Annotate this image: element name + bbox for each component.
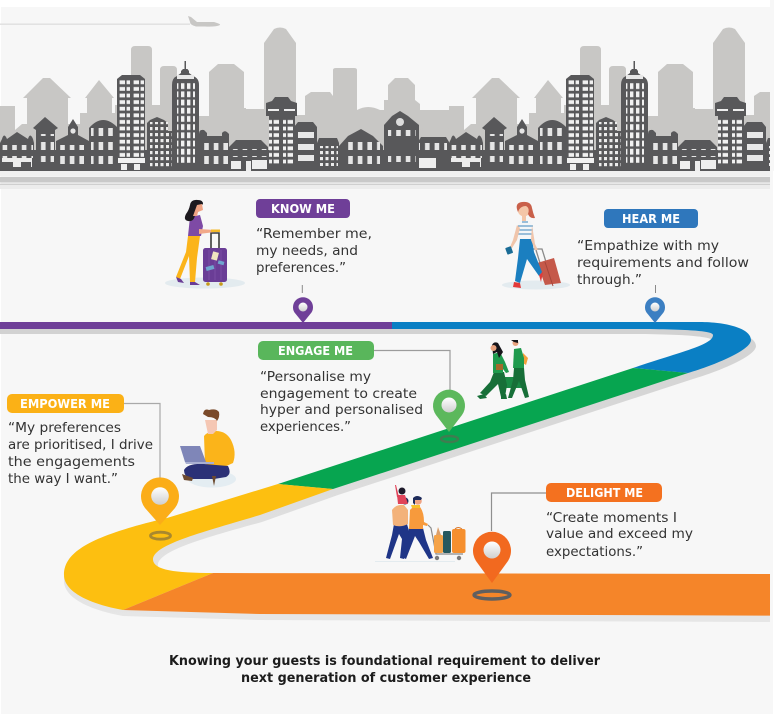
badge and connector: engage me: [258, 341, 450, 391]
badge and connector: delight me: [492, 483, 662, 531]
badge and connector: empower me: [7, 394, 160, 478]
badge: know me: [256, 199, 350, 218]
road: empower me segment: [64, 484, 333, 610]
pin: delight me: [473, 532, 511, 599]
pin: hear me: [645, 285, 665, 323]
quote: know me: my needs, and: [256, 243, 358, 259]
quote: hear me: through.”: [577, 272, 642, 288]
quote: engage me: hyper and personalised: [260, 402, 423, 418]
badge: know me: KNOW ME: [271, 201, 335, 216]
quote: hear me: requirements and follow: [577, 255, 749, 271]
pin: engage me: [433, 390, 465, 442]
road: engage me segment: [278, 368, 688, 489]
quote: delight me: value and exceed my: [546, 526, 693, 542]
panel: hear me: [502, 202, 749, 323]
road: know me segment: [0, 322, 392, 329]
quote: empower me: are prioritised, I drive: [8, 437, 153, 453]
footer statement: Knowing your guests is foundational requirement to deliver: [169, 654, 601, 669]
pin: empower me: [141, 477, 179, 539]
badge: hear me: HEAR ME: [622, 211, 680, 226]
quote: engage me: engagement to create: [260, 386, 417, 402]
quote: engage me: experiences.”: [260, 419, 351, 435]
airplane with contrail: [0, 16, 220, 27]
quote: delight me: expectations.”: [546, 544, 643, 560]
panel: engage me: [258, 340, 529, 442]
road: hear me segment: [392, 322, 751, 373]
panel: know me: [165, 199, 372, 323]
quote: delight me: “Create moments I: [546, 510, 677, 526]
illustration: woman with red suitcase: [502, 202, 570, 290]
illustration: person with laptop: [180, 409, 236, 488]
road: delight me segment: [123, 573, 770, 616]
quote: engage me: “Personalise my: [260, 369, 371, 385]
illustration: walking couple in green: [477, 340, 529, 399]
panel: delight me: [375, 483, 693, 599]
road shadow: [0, 328, 770, 622]
quote: empower me: the engagements: [8, 454, 135, 470]
street strips: [0, 171, 770, 189]
pin: know me: [293, 285, 313, 323]
quote: hear me: “Empathize with my: [577, 238, 719, 254]
illustration: family with luggage cart: [375, 485, 466, 562]
quote: know me: preferences.”: [256, 260, 346, 276]
city skyline: [0, 0, 774, 171]
footer statement: next generation of customer experience: [241, 671, 531, 686]
quote: empower me: the way I want.”: [8, 471, 118, 487]
panel: empower me: [7, 394, 236, 539]
badge and connector: empower me: EMPOWER ME: [20, 396, 110, 411]
badge and connector: delight me: DELIGHT ME: [566, 485, 643, 500]
quote: empower me: “My preferences: [8, 420, 121, 436]
badge: hear me: [604, 209, 698, 228]
illustration: woman with purple suitcase: [165, 200, 245, 288]
quote: know me: “Remember me,: [256, 226, 372, 242]
badge and connector: engage me: ENGAGE ME: [278, 343, 353, 358]
